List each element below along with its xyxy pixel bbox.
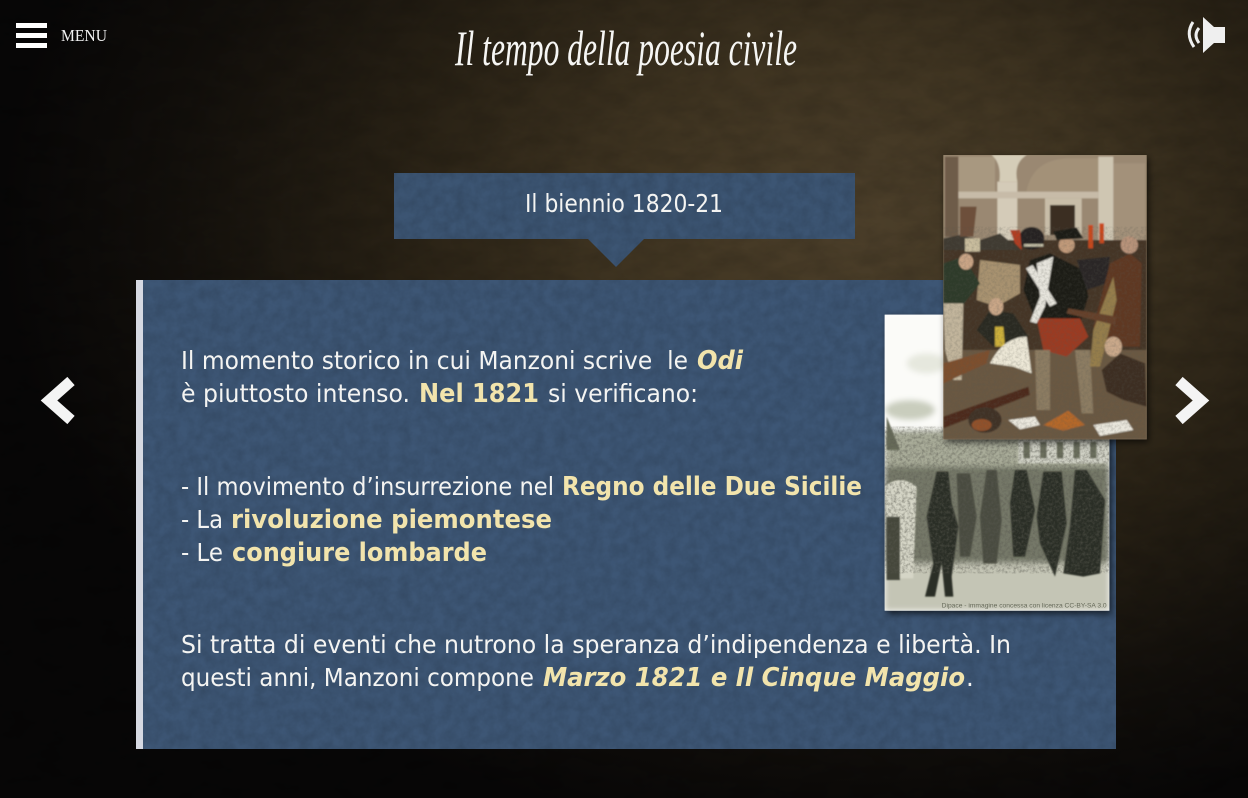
text block: intro: Il momento storico in cui Manzoni scrive le (181, 346, 688, 375)
text block: events list (181, 472, 862, 568)
text block: conclusion: Si tratta di eventi che nutrono la speranza d’indipendenza e libertà. In (181, 630, 1011, 659)
text block: intro (181, 346, 744, 409)
text block: events list: congiure lombarde (232, 538, 487, 568)
image: engraving of crowd (885, 315, 1109, 611)
heading callout (394, 173, 855, 267)
arrow: previous (49, 381, 71, 420)
text block: intro: Nel 1821 (419, 379, 539, 409)
text block: conclusion: Marzo 1821 e Il Cinque Maggio (543, 663, 965, 693)
text block: conclusion: . (966, 663, 974, 692)
panel: main text (136, 280, 1116, 749)
text block: events list: - Il movimento d’insurrezione nel (181, 472, 554, 501)
text block: events list: - Le (181, 538, 223, 567)
text block: conclusion (181, 630, 1011, 693)
image: engraving of crowd: Dipace - immagine concessa con licenza CC-BY-SA 3.0 (942, 602, 1107, 609)
arrow: next (1179, 381, 1201, 420)
text block: intro: Odi (697, 346, 744, 376)
title: Il tempo della poesia civile (454, 20, 797, 76)
text block: events list: - La (181, 505, 223, 534)
heading callout: Il biennio 1820-21 (525, 189, 723, 218)
text block: conclusion: questi anni, Manzoni compone (181, 663, 534, 692)
text block: events list: rivoluzione piemontese (231, 505, 552, 535)
image: painting of insurrection (943, 155, 1147, 439)
text block: events list: Regno delle Due Sicilie (562, 472, 862, 502)
menu button (16, 23, 107, 48)
text block: intro: è piuttosto intenso. (181, 379, 410, 408)
icon: speaker (1189, 17, 1225, 53)
text block: intro: si verificano: (548, 379, 698, 408)
menu button: MENU (61, 26, 107, 45)
